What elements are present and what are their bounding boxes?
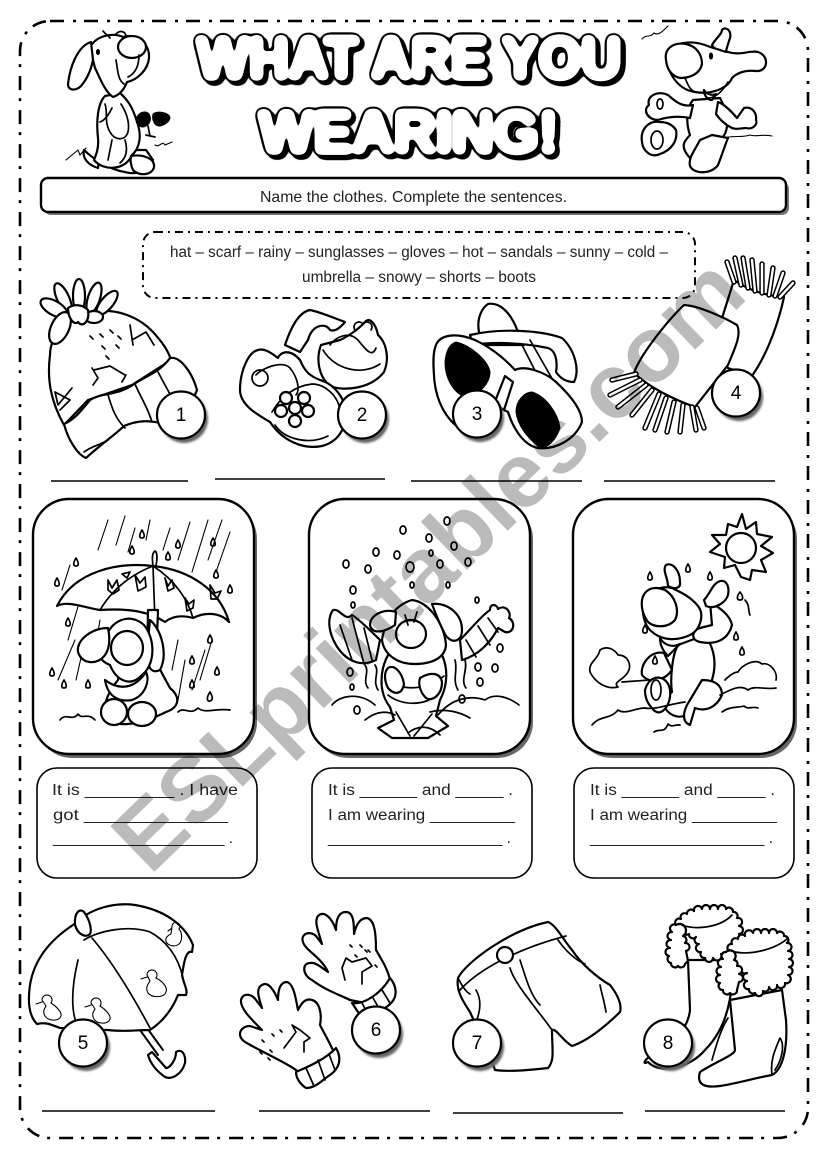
- grass: [592, 687, 776, 732]
- sentence box: snowy: ____________________ .: [327, 830, 511, 847]
- instruction bar: [41, 178, 789, 215]
- sentence box: rainy: ____________________ .: [52, 830, 233, 847]
- bushes: [590, 648, 776, 688]
- number 2: 2: [357, 405, 367, 426]
- title: WHAT ARE YOU: [197, 26, 621, 91]
- sentence box: rainy: [37, 768, 257, 878]
- number 8: [644, 1020, 695, 1071]
- number 3: [453, 390, 504, 442]
- sunny dog: [662, 635, 714, 717]
- item 1: hat: [38, 279, 197, 458]
- snow drifts: [332, 696, 519, 735]
- watermark: ESLprintables.com: [93, 238, 763, 890]
- sentence box: snowy: It is ______ and _____ .: [328, 782, 513, 799]
- panel: sunny: [573, 499, 797, 758]
- dog in rain: [104, 650, 177, 724]
- sentence box: snowy: I am wearing _________: [328, 807, 515, 824]
- icon: walking dog: [642, 26, 772, 172]
- sentence box: rainy: got ______________: [53, 807, 228, 824]
- title: [197, 26, 621, 165]
- number 8: 8: [663, 1033, 673, 1054]
- item 3: sunglasses: [433, 304, 582, 448]
- ducks: [36, 922, 182, 1023]
- number 7: [453, 1020, 504, 1071]
- panel: rainy: [33, 499, 257, 758]
- sentence box: sunny: I am wearing _________: [590, 807, 777, 824]
- rain: [58, 516, 230, 700]
- word bank: hat – scarf – rainy – sunglasses – gloves – hot – sandals – sunny – cold –: [170, 244, 668, 261]
- word bank: [143, 232, 695, 298]
- sun: [710, 514, 773, 580]
- number 4: [712, 370, 763, 421]
- instruction bar: Name the clothes. Complete the sentences.: [260, 189, 567, 206]
- snow dog: [329, 610, 380, 663]
- sentence box: rainy: It is _________ . I have: [52, 782, 238, 799]
- panel: snowy: [309, 499, 533, 758]
- umbrella: [57, 565, 229, 622]
- item 4: scarf: [610, 258, 793, 432]
- snowflakes: [343, 517, 503, 714]
- title: WEARING!: [259, 100, 558, 165]
- number 5: 5: [78, 1033, 88, 1054]
- number 5: [59, 1020, 110, 1071]
- number 3: 3: [472, 404, 482, 425]
- sentence box: sunny: It is ______ and _____ .: [590, 782, 775, 799]
- answer lines row 2: [42, 1111, 785, 1113]
- item 5: umbrella: [29, 904, 193, 1078]
- sentence box: sunny: [574, 768, 794, 878]
- sentence box: sunny: ____________________ .: [589, 830, 773, 847]
- number 1: [157, 392, 208, 443]
- number 1: 1: [176, 405, 186, 426]
- item 2: sandals: [240, 310, 387, 447]
- number 4: 4: [731, 383, 742, 404]
- number 2: [338, 392, 389, 443]
- answer lines row 1: [51, 479, 775, 481]
- sentence box: snowy: [312, 768, 532, 878]
- number 6: 6: [371, 1020, 381, 1041]
- number 6: [352, 1006, 403, 1058]
- word bank: umbrella – snowy – shorts – boots: [302, 269, 536, 286]
- item 6: gloves: [240, 912, 396, 1088]
- number 7: 7: [472, 1033, 482, 1054]
- rain drops: [50, 530, 232, 701]
- item 7: shorts: [458, 922, 621, 1071]
- item 8: boots: [645, 905, 793, 1087]
- icon: dog with sunglasses: [66, 31, 172, 174]
